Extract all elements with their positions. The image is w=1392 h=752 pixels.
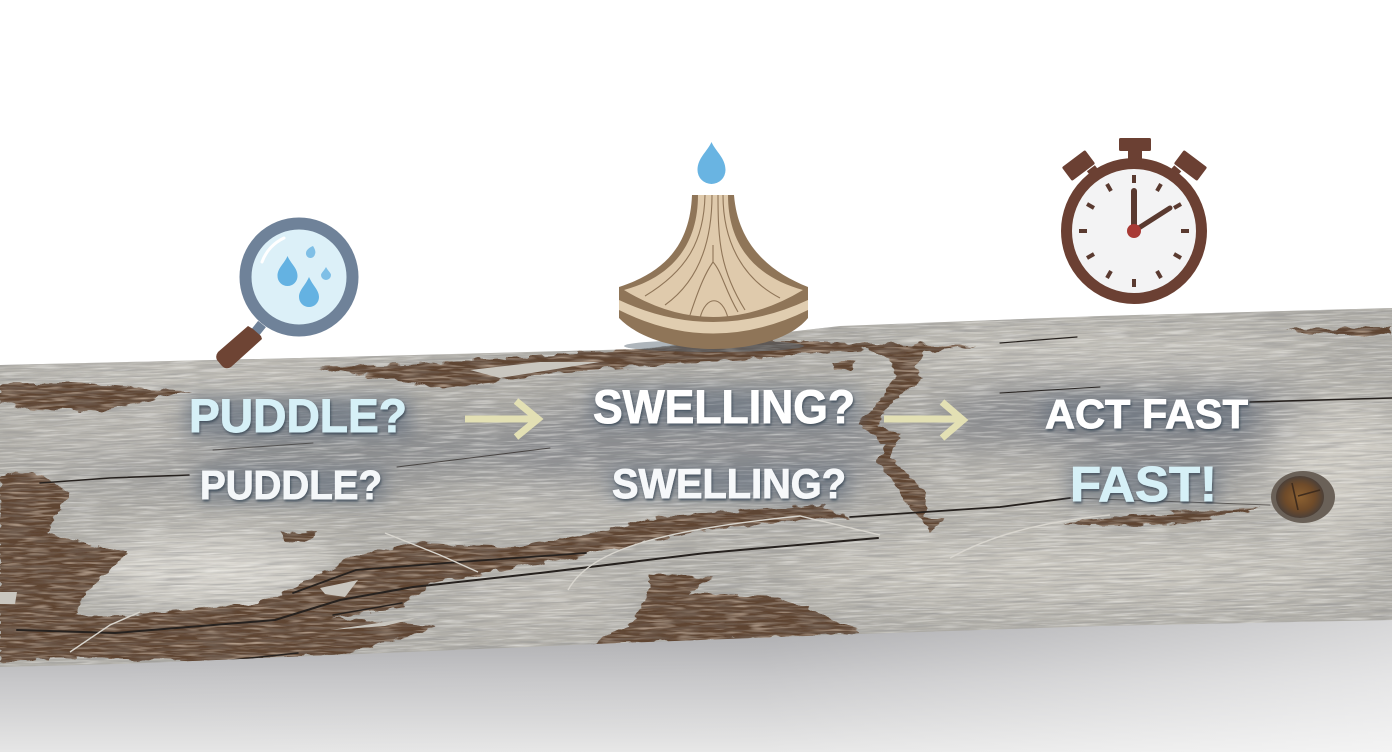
step 2: swollen wood icon [619,195,808,352]
weathered log [0,308,1392,667]
rot patches [0,328,1392,662]
knot [1271,471,1335,523]
wood tonal patches [0,335,1392,624]
step 3 label: FAST!: FAST! [1070,458,1217,512]
step 1 label: PUDDLE? small: PUDDLE? [200,462,382,508]
light chips in rot [0,362,600,630]
step 3: stopwatch icon [1062,138,1207,298]
step 1 label: PUDDLE? large: PUDDLE? [189,389,407,442]
pale fibres [70,515,1110,652]
step 2 label: SWELLING? large: SWELLING? [593,380,855,433]
step 3 label: ACT FAST: ACT FAST [1045,391,1248,437]
step 1: magnifying glass icon [216,224,352,368]
arrow: swelling to act fast [884,402,963,438]
dark cracks [17,337,1392,662]
step 2 label: SWELLING? small: SWELLING? [612,460,846,507]
wood grain [0,308,1392,666]
floor shadow [0,620,1392,752]
icon: water drop [698,142,726,184]
arrow: puddle to swelling [465,401,538,437]
